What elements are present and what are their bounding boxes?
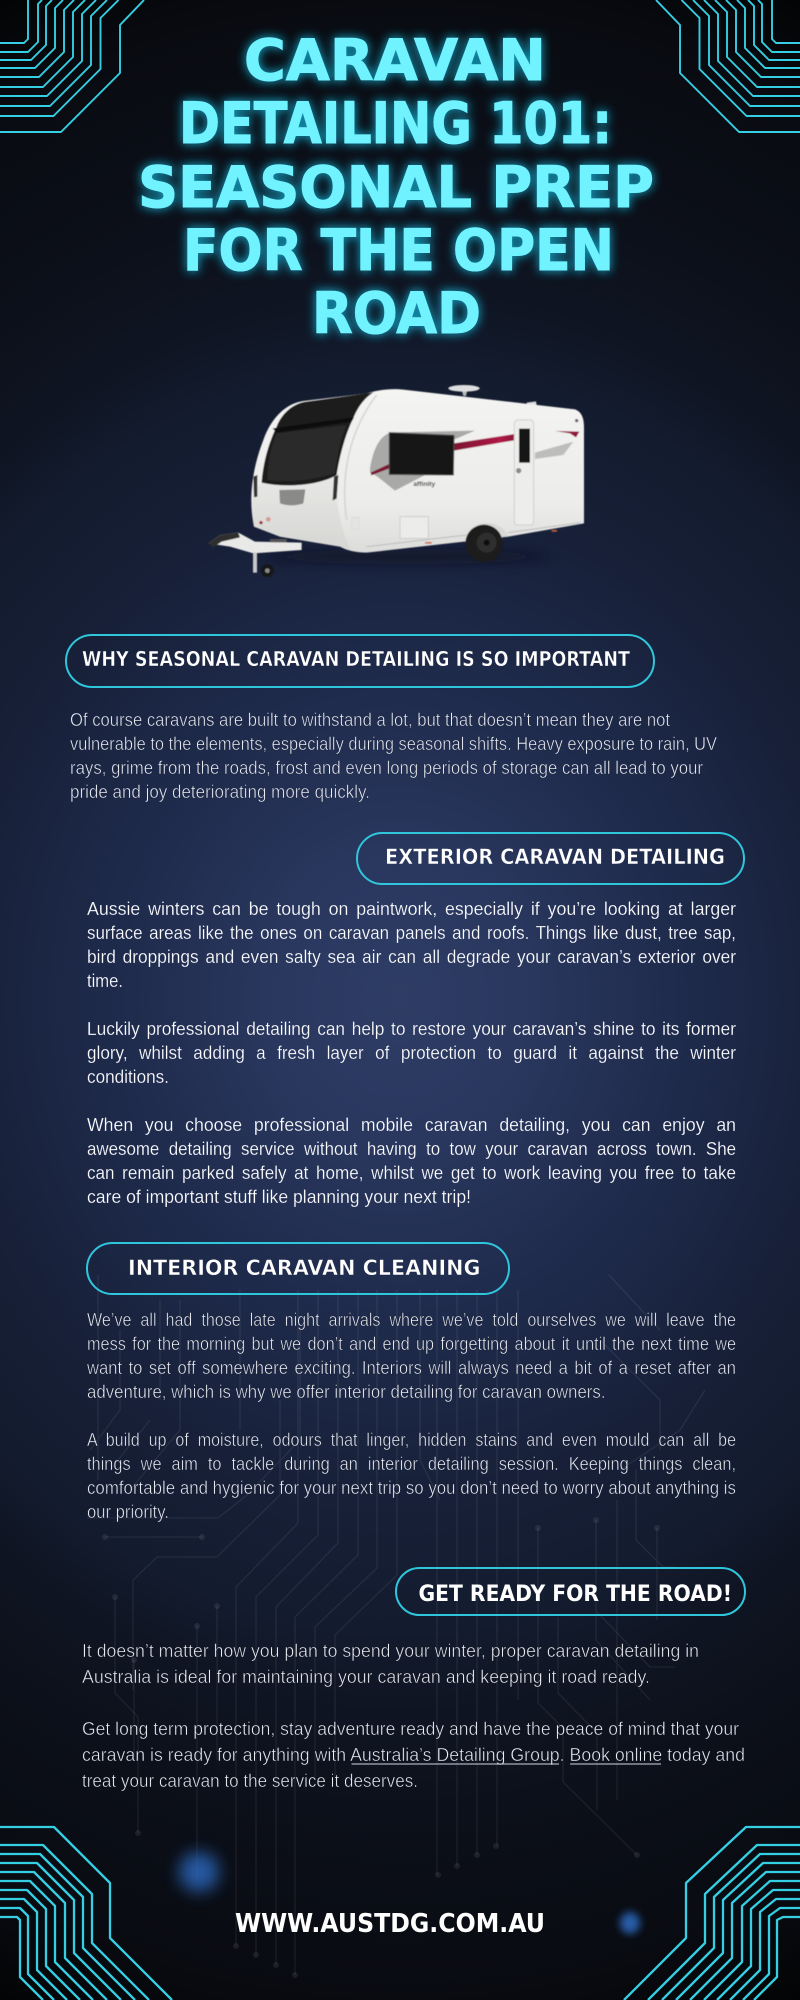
side window [389, 433, 454, 475]
website url: WWW.AUSTDG.COM.AU [235, 1909, 545, 1939]
corner circuit: top right [656, 0, 800, 132]
text block: exterior: conditions. [87, 1067, 169, 1087]
title: ROAD [312, 281, 481, 347]
text block: exterior: can remain parked safely at home, whilst we get to work leaving you free to take [87, 1163, 736, 1183]
caravan illustration [208, 385, 584, 577]
text block: why: Of course caravans are built to withstand a lot, but that doesn’t mean they are not [70, 710, 670, 730]
text block: why: vulnerable to the elements, especially during seasonal shifts. Heavy exposure to rain, UV [70, 734, 717, 754]
heading pill: get ready [396, 1568, 745, 1615]
text block: get ready: treat your caravan to the service it deserves. [82, 1771, 418, 1791]
glow: left blue light [179, 1852, 219, 1892]
heading pill: exterior: EXTERIOR CARAVAN DETAILING [385, 845, 725, 869]
text block: get ready: caravan is ready for anything with Australia’s Detailing Group. Book online today and [82, 1745, 745, 1765]
text block: exterior: care of important stuff like planning your next trip! [87, 1187, 471, 1207]
title: DETAILING 101: [179, 91, 612, 157]
text block: interior: mess for the morning but we don’t and end up forgetting about it until the next time we [87, 1334, 736, 1354]
text block: interior: We’ve all had those late night arrivals where we’ve told ourselves we will leave the [87, 1310, 736, 1330]
text block: get ready: It doesn’t matter how you plan to spend your winter, proper caravan detailing in [82, 1641, 699, 1661]
text block: exterior: awesome detailing service without having to tow your caravan across town. She [87, 1139, 736, 1159]
model name: affinity [413, 481, 435, 488]
title [138, 28, 654, 347]
text block: interior [86, 1310, 736, 1522]
drawbar and jockey wheel [208, 533, 302, 577]
text block: exterior: time. [87, 971, 123, 991]
text block: exterior: bird droppings and even salty sea air can all degrade your caravan’s exterior over [87, 947, 736, 967]
text block: exterior [87, 899, 736, 1207]
front badge [279, 489, 305, 505]
title: SEASONAL PREP [138, 155, 654, 221]
title: FOR THE OPEN [183, 218, 614, 284]
text block: exterior: surface areas like the ones on caravan panels and roofs. Things like dust, tree sap, [87, 923, 736, 943]
glow: right blue light [620, 1912, 640, 1934]
title: DETAILING 101: [179, 91, 612, 157]
section: exterior [87, 833, 744, 1207]
heading pill: get ready: GET READY FOR THE ROAD! [418, 1582, 732, 1607]
front windows [262, 392, 373, 485]
section: why seasonal detailing [66, 635, 717, 802]
corner circuit: bottom left [0, 1827, 172, 2000]
title: ROAD [312, 281, 481, 347]
text block: get ready: Australia is ideal for maintaining your caravan and keeping it road ready. [82, 1667, 650, 1687]
heading pill: interior: INTERIOR CARAVAN CLEANING [128, 1256, 480, 1280]
background circuit pattern [87, 1275, 705, 1978]
section: interior [86, 1243, 736, 1522]
title: CARAVAN [244, 28, 546, 94]
title: FOR THE OPEN [183, 218, 614, 284]
text block: interior: comfortable and hygienic for your next trip so you don’t need to worry about anything is [87, 1478, 736, 1498]
graphic swoosh [370, 431, 475, 491]
heading pill: interior [87, 1243, 509, 1294]
text block: interior: A build up of moisture, odours that linger, hidden stains and even mould can all be [87, 1430, 736, 1450]
text block: exterior: glory, whilst adding a fresh layer of protection to guard it against the winter [87, 1043, 736, 1063]
wheel [465, 523, 508, 562]
locker hatch [400, 517, 428, 538]
heading pill: why: WHY SEASONAL CARAVAN DETAILING IS SO IMPORTANT [82, 647, 630, 671]
skirt [367, 523, 580, 547]
icon: roof dome [448, 385, 480, 396]
heading pill: why [66, 635, 654, 687]
text block: interior: adventure, which is why we offer interior detailing for caravan owners. [87, 1382, 606, 1402]
title: CARAVAN [244, 28, 546, 94]
title: SEASONAL PREP [138, 155, 654, 221]
text block: get ready: Get long term protection, stay adventure ready and have the peace of mind that your [82, 1719, 739, 1739]
text block: why: pride and joy deteriorating more quickly. [70, 782, 370, 802]
text block: exterior: When you choose professional mobile caravan detailing, you can enjoy an [87, 1115, 736, 1135]
corner circuit: top left [0, 0, 144, 132]
text block: exterior: Luckily professional detailing can help to restore your caravan’s shine to its former [87, 1019, 736, 1039]
text block: why [70, 710, 717, 802]
door [514, 420, 534, 525]
text block: interior: our priority. [87, 1502, 169, 1522]
text block: interior: things we aim to tackle during an interior detailing session. Keeping things clean, [87, 1454, 736, 1474]
caravan body [251, 389, 584, 553]
corner circuit: bottom right [624, 1827, 800, 2000]
text block: interior: want to set off somewhere exciting. Interiors will always need a bit of a reset after an [86, 1358, 736, 1378]
front panel [252, 475, 350, 549]
section: get ready [82, 1568, 745, 1791]
heading pill: exterior [357, 833, 744, 884]
text block: exterior: Aussie winters can be tough on paintwork, especially if you’re looking at larger [87, 899, 736, 919]
text block: why: rays, grime from the roads, frost and even long periods of storage can all lead to your [70, 758, 703, 778]
text block: get ready [82, 1641, 745, 1791]
